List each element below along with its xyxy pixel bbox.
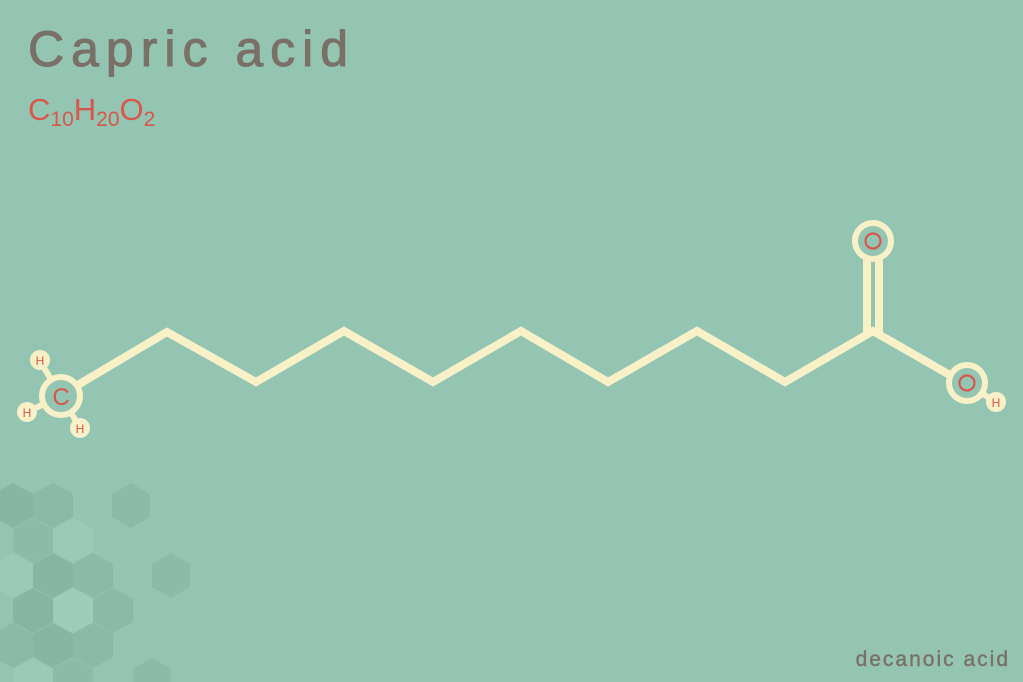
methyl group CH3: H (76, 422, 84, 436)
formula: H (74, 92, 96, 127)
formula: 20 (96, 108, 120, 131)
formula: O (120, 92, 144, 127)
carbonyl oxygen (855, 223, 891, 259)
formula: 2 (144, 108, 155, 131)
methyl group CH3 (17, 350, 90, 438)
hydroxyl group OH: H (992, 396, 1000, 410)
decorative hexagon pattern (0, 483, 190, 682)
formula: 10 (50, 108, 74, 131)
title: Capric acid (28, 21, 355, 77)
molecule: carbon chain (76, 258, 955, 386)
methyl group CH3: H (23, 406, 31, 420)
hydroxyl group OH (949, 365, 1006, 412)
formula: C (28, 92, 50, 127)
subtitle: decanoic acid: decanoic acid (856, 648, 1010, 671)
methyl group CH3: H (36, 354, 44, 368)
methyl group CH3: C (52, 384, 70, 411)
